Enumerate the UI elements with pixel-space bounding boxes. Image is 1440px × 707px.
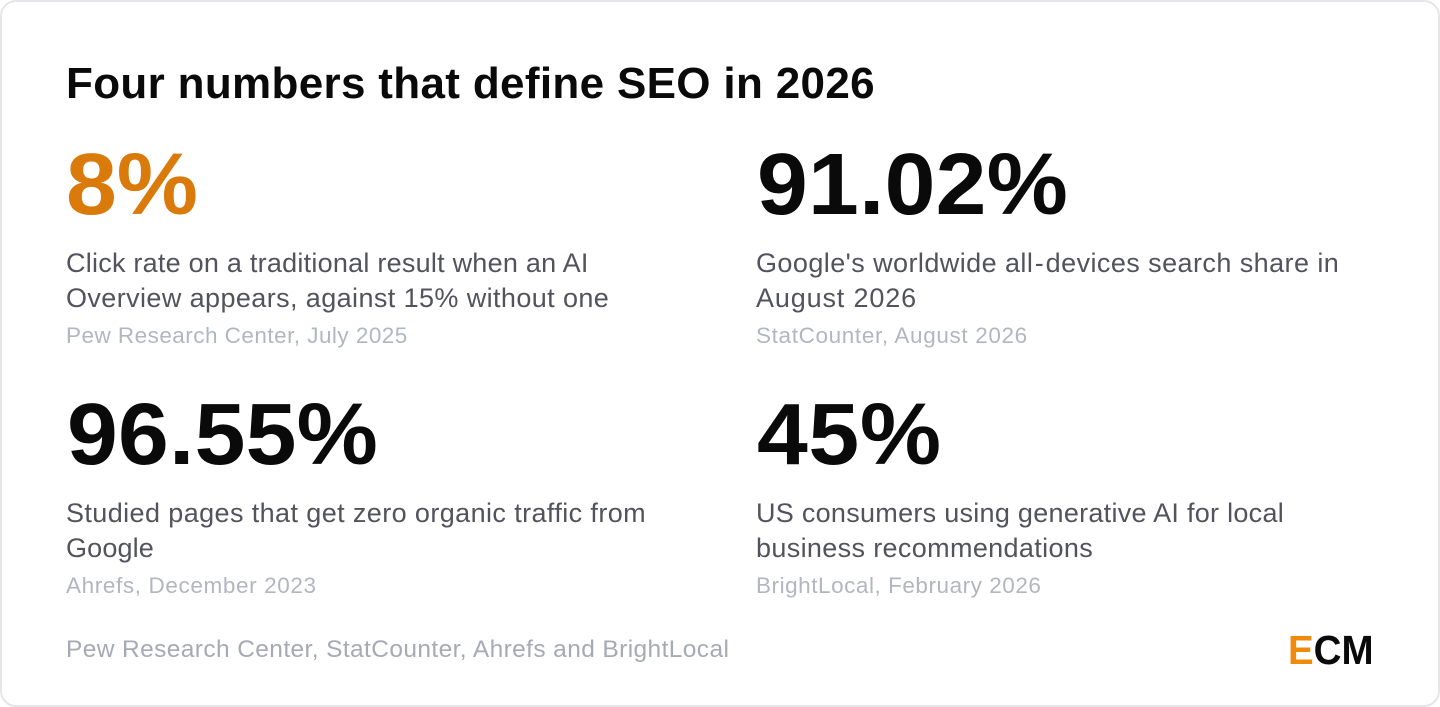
description <box>756 498 1284 563</box>
number: 91.02% <box>757 136 1068 233</box>
description: Google <box>66 533 154 563</box>
description: Overview appears, against 15% without one <box>66 283 609 313</box>
description <box>756 248 1339 313</box>
stat: 45% <box>756 386 1284 598</box>
source: Pew Research Center, July 2025 <box>66 323 408 348</box>
source: StatCounter, August 2026 <box>756 323 1028 348</box>
description <box>66 248 609 313</box>
number: 45% <box>757 386 942 483</box>
stat: 8% <box>66 136 609 348</box>
description <box>66 498 646 563</box>
stat: 96.55% <box>66 386 646 598</box>
source: BrightLocal, February 2026 <box>756 573 1041 598</box>
number: 8% <box>66 136 198 233</box>
description: US consumers using generative AI for local <box>756 498 1284 528</box>
number: 96.55% <box>67 386 378 483</box>
description: Click rate on a traditional result when an AI <box>66 248 589 278</box>
description: Studied pages that get zero organic traffic from <box>66 498 646 528</box>
stat: 91.02% <box>756 136 1339 348</box>
description: business recommendations <box>756 533 1093 563</box>
logo: ECM: ECM <box>1288 627 1374 673</box>
footer sources: Pew Research Center, StatCounter, Ahrefs and BrightLocal <box>66 636 729 663</box>
description: August 2026 <box>756 283 917 313</box>
description: Google's worldwide all-devices search share in <box>756 248 1339 278</box>
source: Ahrefs, December 2023 <box>66 573 317 598</box>
title: Four numbers that define SEO in 2026 <box>66 59 875 108</box>
